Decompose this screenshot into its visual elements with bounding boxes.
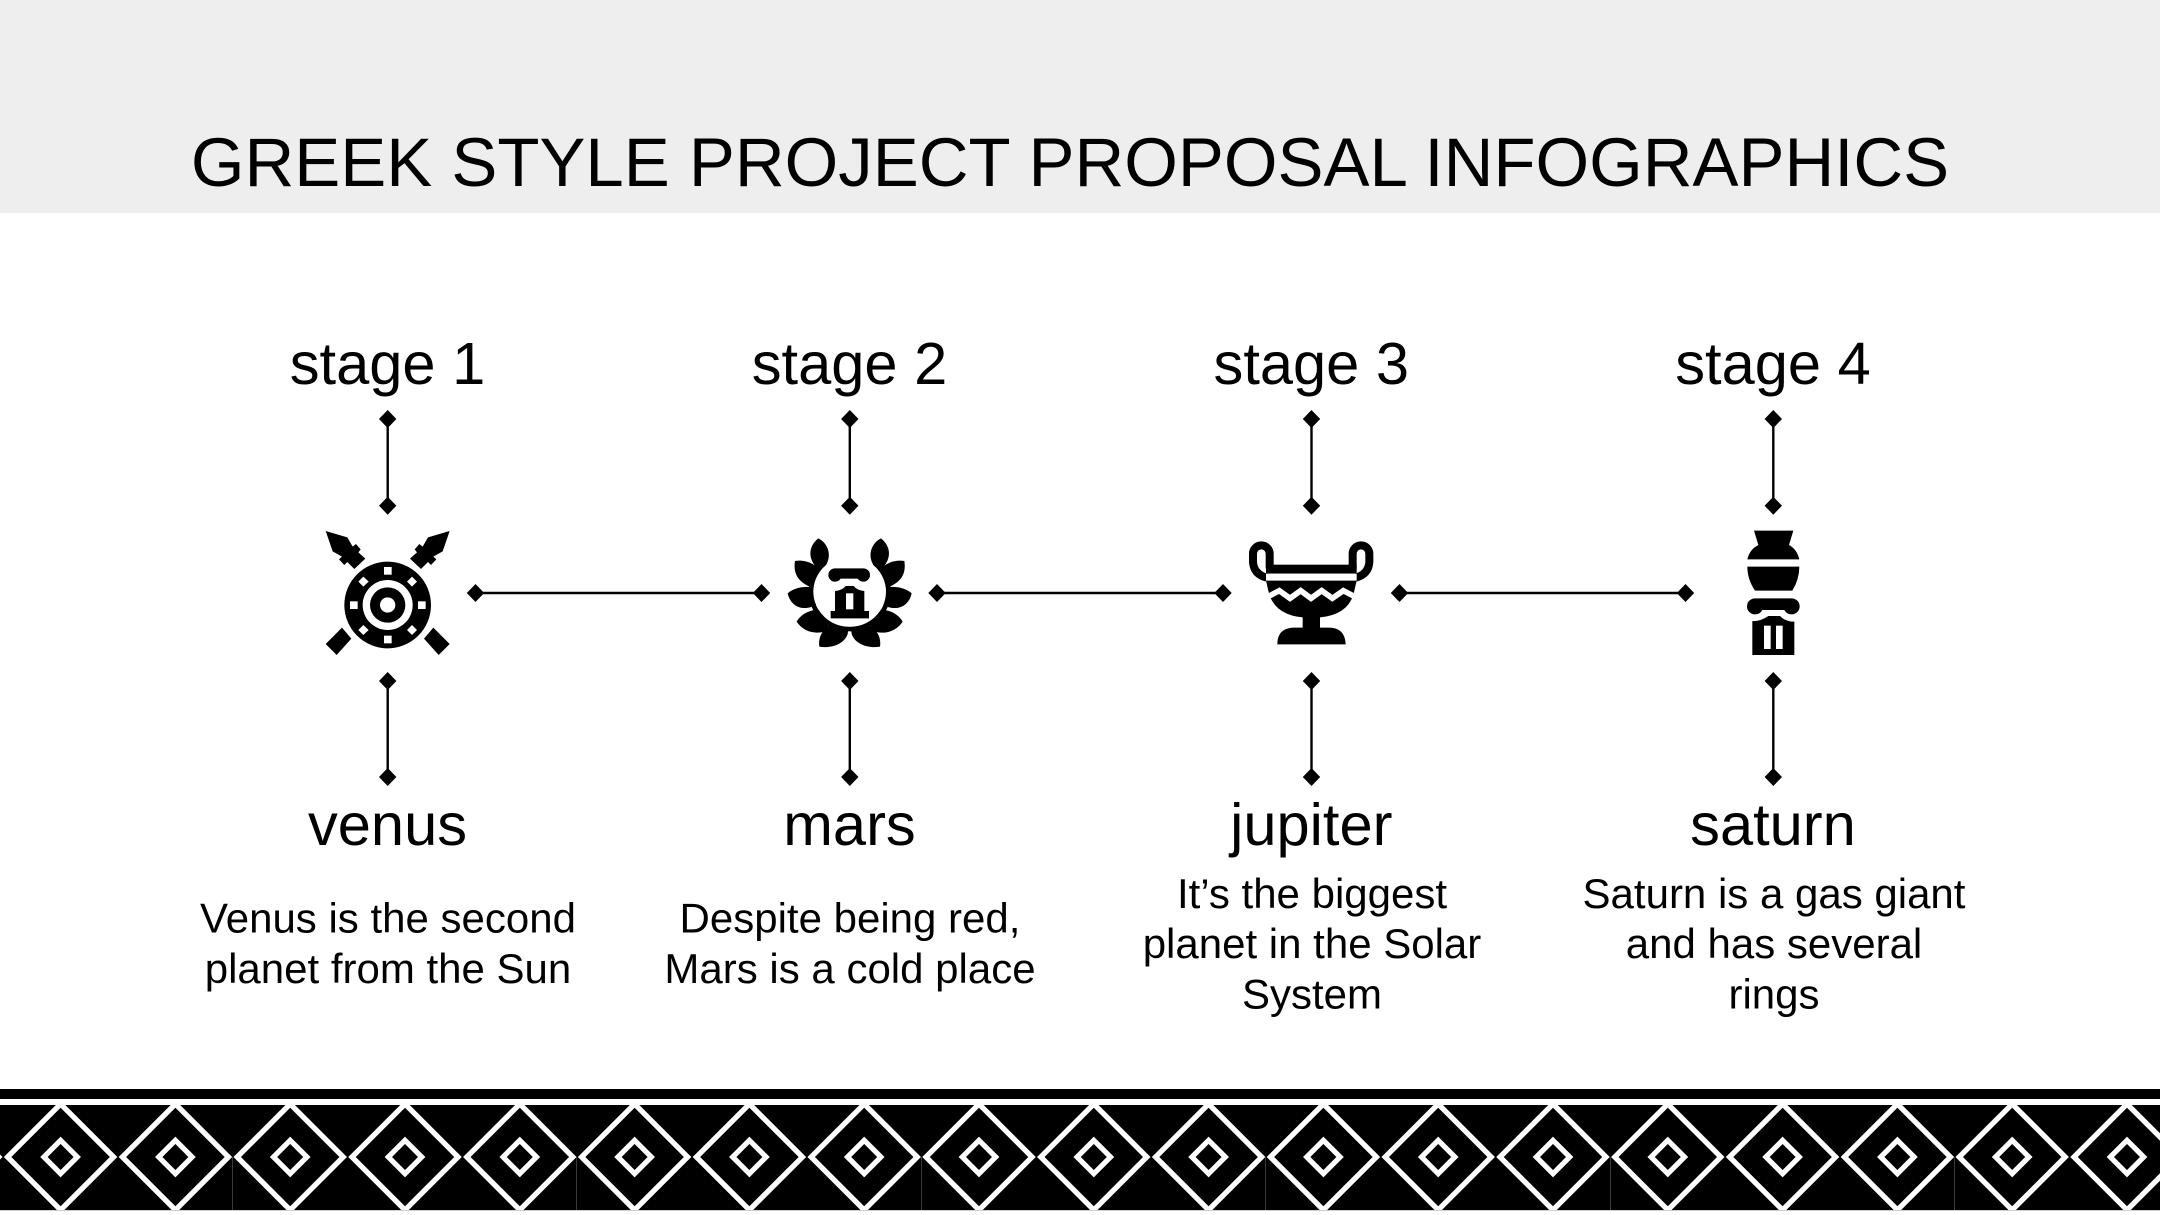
decorative greek border band [0, 1089, 2160, 1211]
description: mars: Mars is a cold place [664, 945, 1036, 992]
stage 2 label: stage 2 [752, 330, 947, 397]
planet name: venus: venus [308, 791, 467, 858]
stage 4 label: stage 4 [1675, 330, 1871, 397]
connector: stage 4 to icon [1765, 410, 1782, 515]
icon: greek krater vase [1253, 545, 1369, 644]
description: venus: planet from the Sun [205, 945, 571, 992]
stage 3 column [1143, 330, 1481, 1018]
connector: stage 3 to stage 4 [1391, 584, 1694, 602]
stage 4 column [1583, 330, 1966, 1018]
description: saturn: and has several [1626, 920, 1922, 967]
connector: stage 1 to icon [379, 410, 396, 515]
title: GREEK STYLE PROJECT PROPOSAL INFOGRAPHICS [191, 124, 1949, 201]
connector: stage 3 to icon [1303, 410, 1320, 515]
connector: icon to venus [379, 672, 396, 786]
description: saturn: rings [1728, 970, 1820, 1018]
planet name: jupiter: jupiter [1228, 791, 1392, 858]
description: mars: Despite being red, [680, 894, 1020, 942]
connector: icon to jupiter [1303, 672, 1320, 786]
icon: shield and spears [326, 531, 450, 655]
stage 1 label: stage 1 [290, 330, 485, 397]
description: saturn: Saturn is a gas giant [1583, 870, 1966, 917]
connector: stage 1 to stage 2 [467, 584, 770, 602]
description: venus: Venus is the second [200, 894, 576, 942]
connector: icon to saturn [1765, 672, 1782, 786]
connector: stage 2 to icon [841, 410, 858, 515]
planet name: mars: mars [783, 791, 916, 858]
description: jupiter: System [1242, 970, 1382, 1018]
connector: icon to mars [841, 672, 858, 786]
icon: vase on column [1747, 531, 1800, 655]
connector: stage 2 to stage 3 [928, 584, 1232, 602]
stage 2 column [664, 330, 1036, 992]
icon: laurel wreath and column [788, 538, 912, 647]
planet name: saturn: saturn [1690, 791, 1856, 858]
description: jupiter: It’s the biggest [1177, 870, 1447, 917]
header band [0, 0, 2160, 213]
stage 1 column [200, 330, 576, 992]
description: jupiter: planet in the Solar [1143, 920, 1481, 967]
stage 3 label: stage 3 [1214, 330, 1409, 397]
